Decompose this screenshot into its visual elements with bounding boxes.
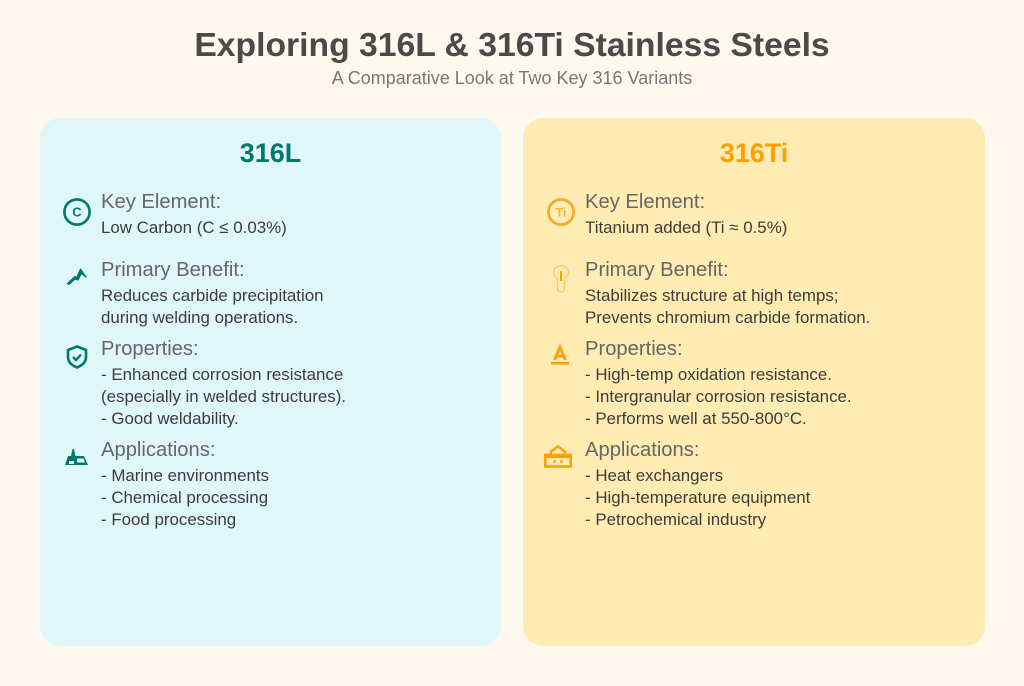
text: applications: - Petrochemical industry	[585, 510, 766, 529]
text: applications: Applications:	[585, 439, 699, 461]
text: primary benefit: Prevents chromium carbide formation.	[585, 308, 870, 327]
text: applications: - Heat exchangers	[585, 466, 723, 485]
text: primary benefit: Primary Benefit:	[101, 259, 245, 281]
heading: 316L: 316L	[240, 138, 301, 168]
text: primary benefit	[101, 259, 324, 327]
icon: properties	[551, 344, 569, 365]
text: properties: - High-temp oxidation resistance.	[585, 365, 832, 384]
subtitle: A Comparative Look at Two Key 316 Variants	[332, 68, 692, 88]
text: applications: - High-temperature equipment	[585, 488, 810, 507]
heading: 316Ti: 316Ti	[720, 138, 788, 168]
icon: thermometer	[552, 265, 570, 293]
text: properties: - Enhanced corrosion resistance	[101, 365, 343, 384]
text: primary benefit: Reduces carbide precipitation	[101, 286, 324, 305]
text: applications	[585, 439, 810, 529]
text: primary benefit: Stabilizes structure at high temps;	[585, 286, 838, 305]
icon: carbon: C	[72, 205, 82, 220]
panel: 316L	[40, 118, 501, 646]
icon: applications	[65, 449, 88, 465]
text: key element: Titanium added (Ti ≈ 0.5%)	[585, 218, 787, 237]
text: key element	[585, 191, 787, 237]
text: key element: Low Carbon (C ≤ 0.03%)	[101, 218, 287, 237]
text: key element: Key Element:	[585, 191, 705, 213]
text: properties: Properties:	[585, 338, 683, 360]
text: key element	[101, 191, 287, 237]
text: properties: - Good weldability.	[101, 409, 239, 428]
icon: titanium: Ti	[556, 206, 566, 220]
text: properties: Properties:	[101, 338, 199, 360]
text: primary benefit	[585, 259, 870, 327]
text: applications: - Food processing	[101, 510, 236, 529]
text: primary benefit: Primary Benefit:	[585, 259, 729, 281]
text: applications: - Marine environments	[101, 466, 269, 485]
icon: shield	[66, 345, 88, 369]
text: properties: - Intergranular corrosion resistance.	[585, 387, 852, 406]
title: Exploring 316L & 316Ti Stainless Steels	[194, 26, 830, 64]
text: applications: Applications:	[101, 439, 215, 461]
icon: carbon	[63, 198, 91, 226]
text: applications	[101, 439, 269, 529]
icon: applications	[544, 445, 572, 468]
text: applications: - Chemical processing	[101, 488, 268, 507]
text: properties	[101, 338, 346, 428]
panel: 316Ti	[523, 118, 985, 646]
text: properties: (especially in welded structures).	[101, 387, 346, 406]
text: properties	[585, 338, 852, 428]
icon: titanium	[547, 198, 575, 226]
text: key element: Key Element:	[101, 191, 221, 213]
text: primary benefit: during welding operations.	[101, 308, 298, 327]
icon: benefit	[66, 268, 87, 286]
text: properties: - Performs well at 550-800°C.	[585, 409, 807, 428]
